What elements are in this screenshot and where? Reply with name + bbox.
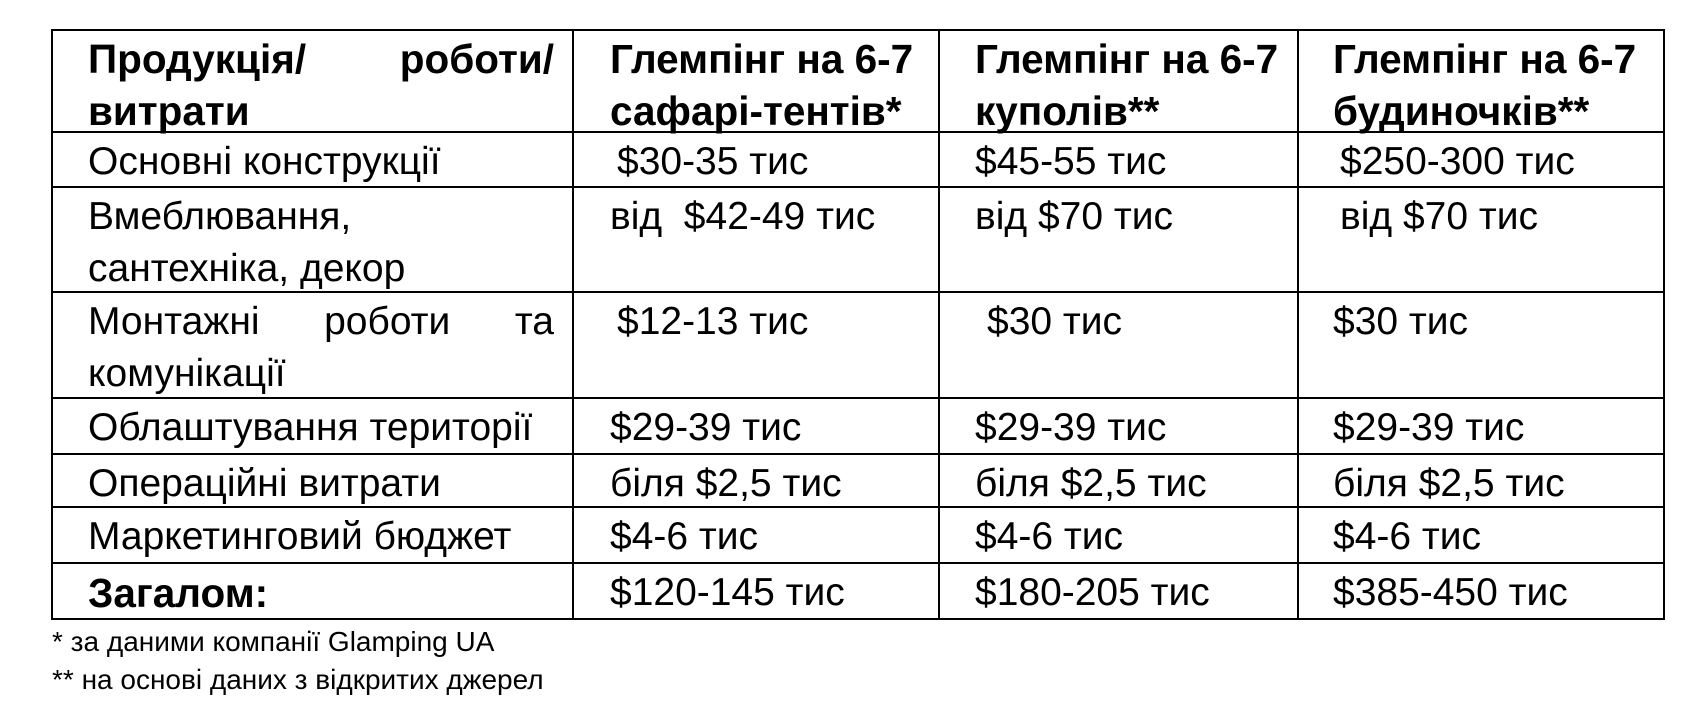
row: Вмеблювання: від $70 тис [975, 195, 1173, 238]
row: Монтажні роботи: $30 тис [987, 300, 1122, 343]
header row: Глемпінг на 6-7 [1333, 36, 1636, 82]
row: Основні конструкції: $30-35 тис [617, 140, 808, 183]
row: Загалом: $120-145 тис [610, 571, 845, 614]
footnote 2: ** на основі даних з відкритих джерел [52, 664, 544, 695]
header row: куполів** [975, 88, 1159, 134]
row: Маркетинговий: $4-6 тис [1333, 515, 1481, 558]
row: Маркетинговий: $4-6 тис [975, 515, 1123, 558]
header row: Глемпінг на 6-7 [975, 36, 1278, 82]
row: Маркетинговий: $4-6 тис [610, 515, 758, 558]
row: Загалом: $385-450 тис [1333, 571, 1568, 614]
row: Монтажні роботи [88, 300, 1468, 395]
row: Основні конструкції: Основні конструкції [88, 140, 441, 183]
row: Маркетинговий: Маркетинговий бюджет [88, 515, 511, 558]
row: Вмеблювання: від $42-49 тис [610, 195, 875, 238]
row: Основні конструкції: $45-55 тис [975, 140, 1166, 183]
row: Загалом: $180-205 тис [975, 571, 1210, 614]
row: Операційні: біля $2,5 тис [1333, 462, 1565, 505]
header row: сафарі-тентів* [610, 88, 902, 134]
row: Операційні: біля $2,5 тис [610, 462, 842, 505]
header row [88, 36, 1636, 134]
row: Вмеблювання [88, 195, 1538, 290]
row: Монтажні роботи: Монтажні роботи та комунікації [88, 300, 554, 395]
row: Монтажні роботи: $30 тис [1333, 300, 1468, 343]
row: Вмеблювання: сантехніка, декор [88, 247, 405, 290]
row: Вмеблювання: Вмеблювання, [88, 195, 351, 238]
row: Облаштування: $29-39 тис [610, 406, 801, 449]
row: Облаштування: Облаштування території [88, 406, 532, 449]
header row: Продукція/ роботи/ витрати [88, 36, 554, 134]
header row: будиночків** [1333, 88, 1589, 134]
row: Монтажні роботи: $12-13 тис [617, 300, 808, 343]
header row: Глемпінг на 6-7 [610, 36, 913, 82]
footnote 1: * за даними компанії Glamping UA [52, 626, 494, 657]
row: Облаштування: $29-39 тис [975, 406, 1166, 449]
row: Загалом [88, 570, 1568, 616]
row: Вмеблювання: від $70 тис [1340, 195, 1538, 238]
row: Облаштування: $29-39 тис [1333, 406, 1524, 449]
row: Основні конструкції [88, 140, 1575, 183]
row: Операційні: біля $2,5 тис [975, 462, 1207, 505]
row: Облаштування [88, 406, 1524, 449]
row: Загалом: Загалом: [88, 570, 268, 616]
row: Операційні [88, 462, 1565, 505]
row: Операційні: Операційні витрати [88, 462, 441, 505]
row: Маркетинговий [88, 515, 1481, 558]
row: Основні конструкції: $250-300 тис [1340, 140, 1575, 183]
